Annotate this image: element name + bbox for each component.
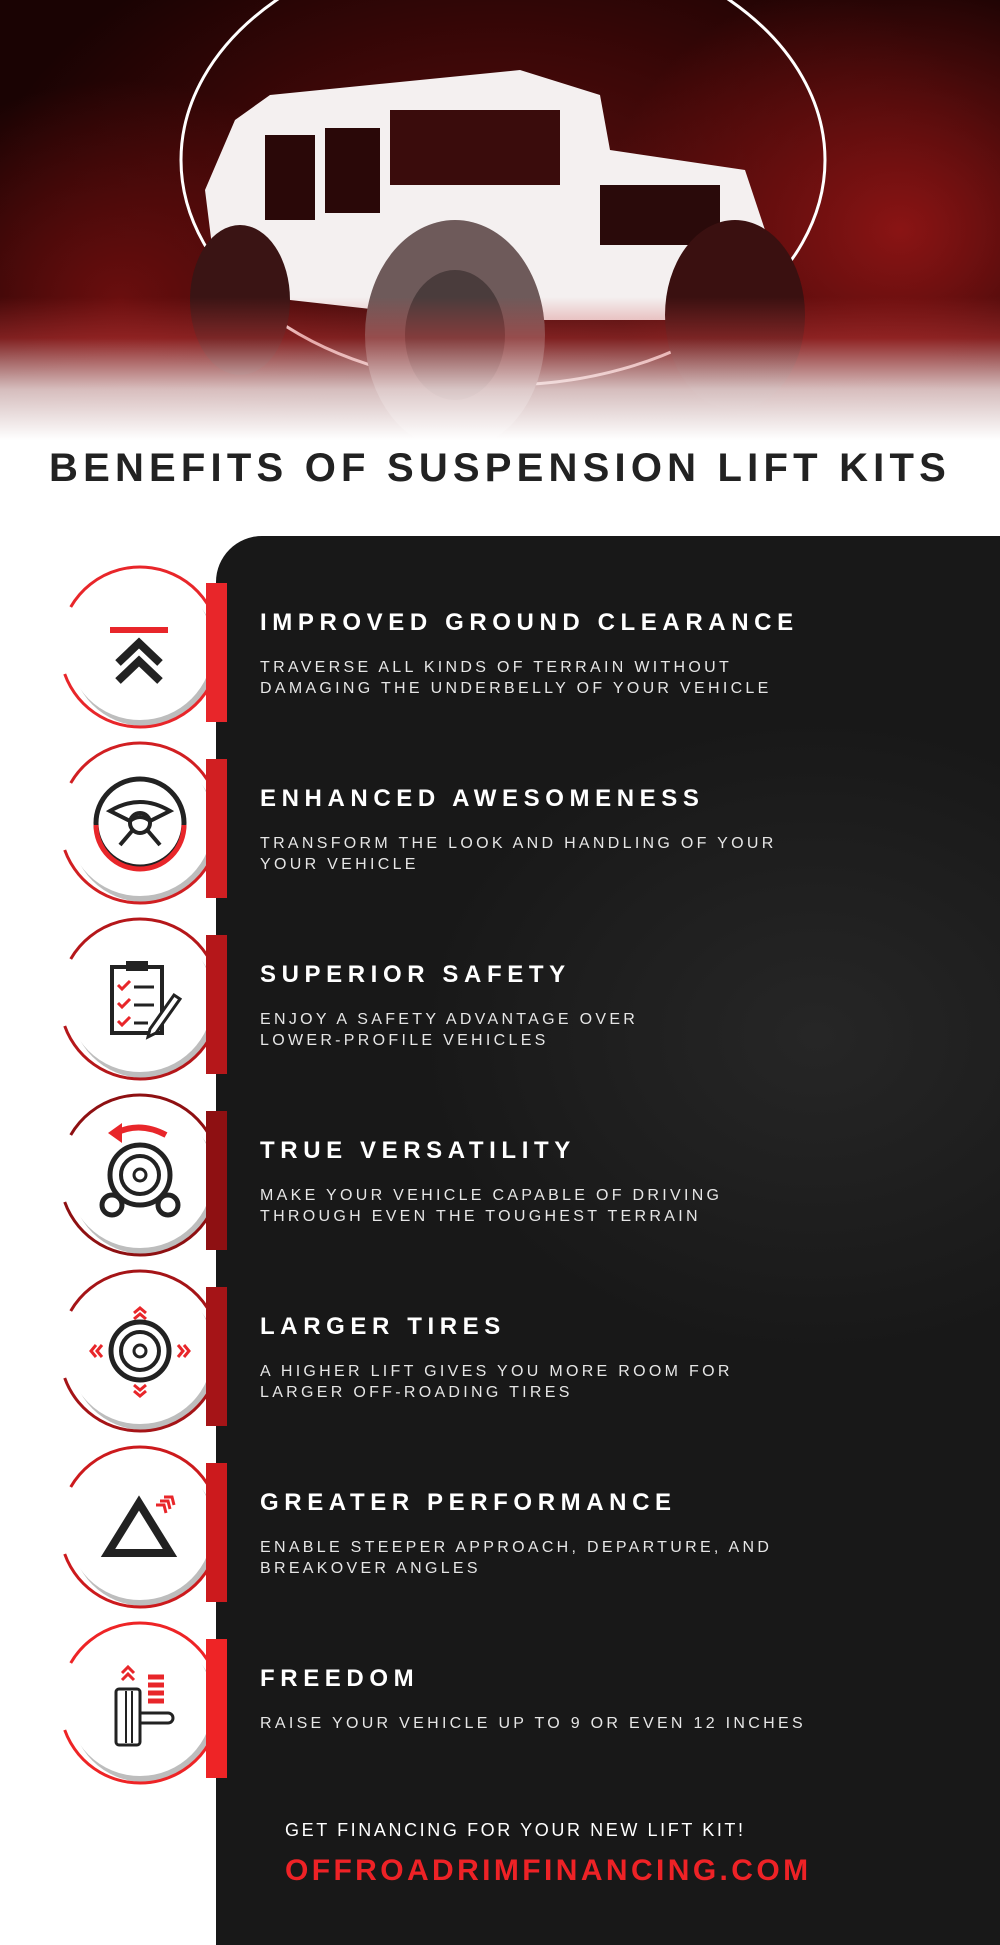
description: TRAVERSE ALL KINDS OF TERRAIN WITHOUT <box>260 659 732 676</box>
icon: steering wheel <box>63 742 206 904</box>
red bar <box>206 1639 227 1778</box>
hero: ellipse outline <box>181 0 825 385</box>
description <box>260 1011 638 1049</box>
icon: tire with arrows <box>63 1270 206 1432</box>
description: THROUGH EVEN THE TOUGHEST TERRAIN <box>260 1208 701 1225</box>
description: TRANSFORM THE LOOK AND HANDLING OF YOUR <box>260 835 777 852</box>
icon: suspension spring <box>63 1622 206 1784</box>
heading: GREATER PERFORMANCE <box>260 1489 677 1516</box>
heading: SUPERIOR SAFETY <box>260 961 571 988</box>
heading: LARGER TIRES <box>260 1313 506 1340</box>
footer url: OFFROADRIMFINANCING.COM <box>285 1854 812 1887</box>
item 1: improved ground clearance <box>63 566 799 728</box>
icon: triangle <box>63 1446 206 1608</box>
item 5: larger tires <box>63 1270 733 1432</box>
hero: jeep <box>190 70 805 450</box>
red bar <box>206 1111 227 1250</box>
item 6: greater performance <box>63 1446 772 1608</box>
description: DAMAGING THE UNDERBELLY OF YOUR VEHICLE <box>260 680 772 697</box>
description: ENABLE STEEPER APPROACH, DEPARTURE, AND <box>260 1539 772 1556</box>
heading: TRUE VERSATILITY <box>260 1137 576 1164</box>
description: RAISE YOUR VEHICLE UP TO 9 OR EVEN 12 INCHES <box>260 1715 806 1732</box>
icon: tire with rotate arrow <box>63 1094 206 1256</box>
item 4: true versatility <box>63 1094 722 1256</box>
red bar <box>206 1287 227 1426</box>
description: LARGER OFF-ROADING TIRES <box>260 1384 573 1401</box>
icon: double chevron up <box>63 566 206 728</box>
description: BREAKOVER ANGLES <box>260 1560 481 1577</box>
red bar <box>206 935 227 1074</box>
red bar <box>206 583 227 722</box>
heading: IMPROVED GROUND CLEARANCE <box>260 609 799 636</box>
icon: clipboard <box>63 918 206 1080</box>
heading: ENHANCED AWESOMENESS <box>260 785 704 812</box>
description: LOWER-PROFILE VEHICLES <box>260 1032 549 1049</box>
title: BENEFITS OF SUSPENSION LIFT KITS <box>49 446 951 490</box>
description <box>260 1539 772 1577</box>
description: A HIGHER LIFT GIVES YOU MORE ROOM FOR <box>260 1363 733 1380</box>
description: MAKE YOUR VEHICLE CAPABLE OF DRIVING <box>260 1187 722 1204</box>
heading: FREEDOM <box>260 1665 419 1692</box>
description <box>260 659 772 697</box>
red bar <box>206 1463 227 1602</box>
description <box>260 1187 722 1225</box>
hero image <box>0 0 1000 512</box>
description <box>260 1363 733 1401</box>
red bar <box>206 759 227 898</box>
dark panel <box>216 536 1000 1945</box>
footer call to action: GET FINANCING FOR YOUR NEW LIFT KIT! <box>285 1820 746 1840</box>
item 7: freedom <box>63 1622 806 1784</box>
description: YOUR VEHICLE <box>260 856 419 873</box>
description <box>260 835 777 873</box>
item 3: superior safety <box>63 918 638 1080</box>
description: ENJOY A SAFETY ADVANTAGE OVER <box>260 1011 638 1028</box>
item 2: enhanced awesomeness <box>63 742 777 904</box>
